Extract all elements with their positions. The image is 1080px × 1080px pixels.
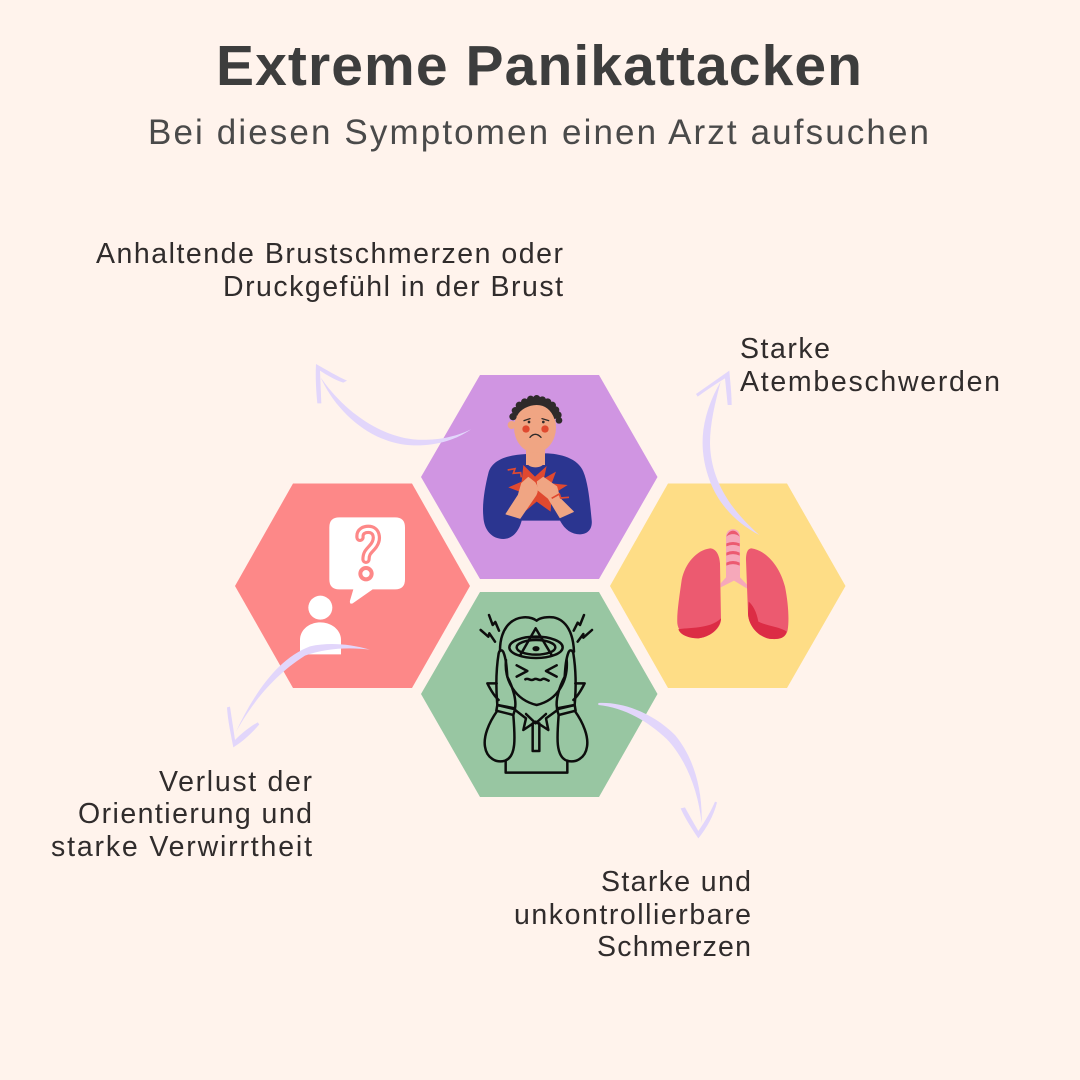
arrow: pain label — [598, 703, 717, 838]
icon: person holding head — [481, 615, 592, 773]
text: breathing problems: Starke — [740, 333, 830, 365]
arrow: chest pain label — [316, 364, 471, 445]
subtitle: Bei diesen Symptomen einen Arzt aufsuchen — [148, 113, 929, 152]
icon: person with question bubble — [300, 517, 405, 654]
text: disorientation: starke Verwirrtheit — [51, 831, 312, 863]
text: severe pain: Schmerzen — [597, 931, 751, 963]
text: breathing problems: Atembeschwerden — [740, 366, 1000, 398]
text: severe pain — [514, 866, 751, 963]
text: disorientation: Orientierung und — [78, 798, 312, 830]
text: severe pain: unkontrollierbare — [514, 899, 751, 931]
panel: red hexagon with confused person — [235, 484, 470, 688]
icon: man holding chest — [483, 395, 592, 539]
title: Extreme Panikattacken — [216, 34, 862, 98]
arrow: orientation label — [227, 644, 370, 747]
panel: yellow hexagon with lungs — [610, 484, 846, 688]
icon: lungs — [677, 529, 788, 639]
text: chest pain: Druckgefühl in der Brust — [223, 271, 563, 303]
text: disorientation — [51, 766, 312, 863]
panel: green hexagon with headache figure — [421, 592, 658, 797]
text: breathing problems — [740, 333, 1000, 398]
text: severe pain: Starke und — [601, 866, 751, 898]
text: disorientation: Verlust der — [159, 766, 312, 798]
arrow: breathing label — [696, 371, 759, 535]
text: chest pain: Anhaltende Brustschmerzen oder — [96, 238, 564, 270]
text: chest pain — [96, 238, 564, 303]
panel: purple hexagon with chest pain figure — [421, 375, 658, 579]
